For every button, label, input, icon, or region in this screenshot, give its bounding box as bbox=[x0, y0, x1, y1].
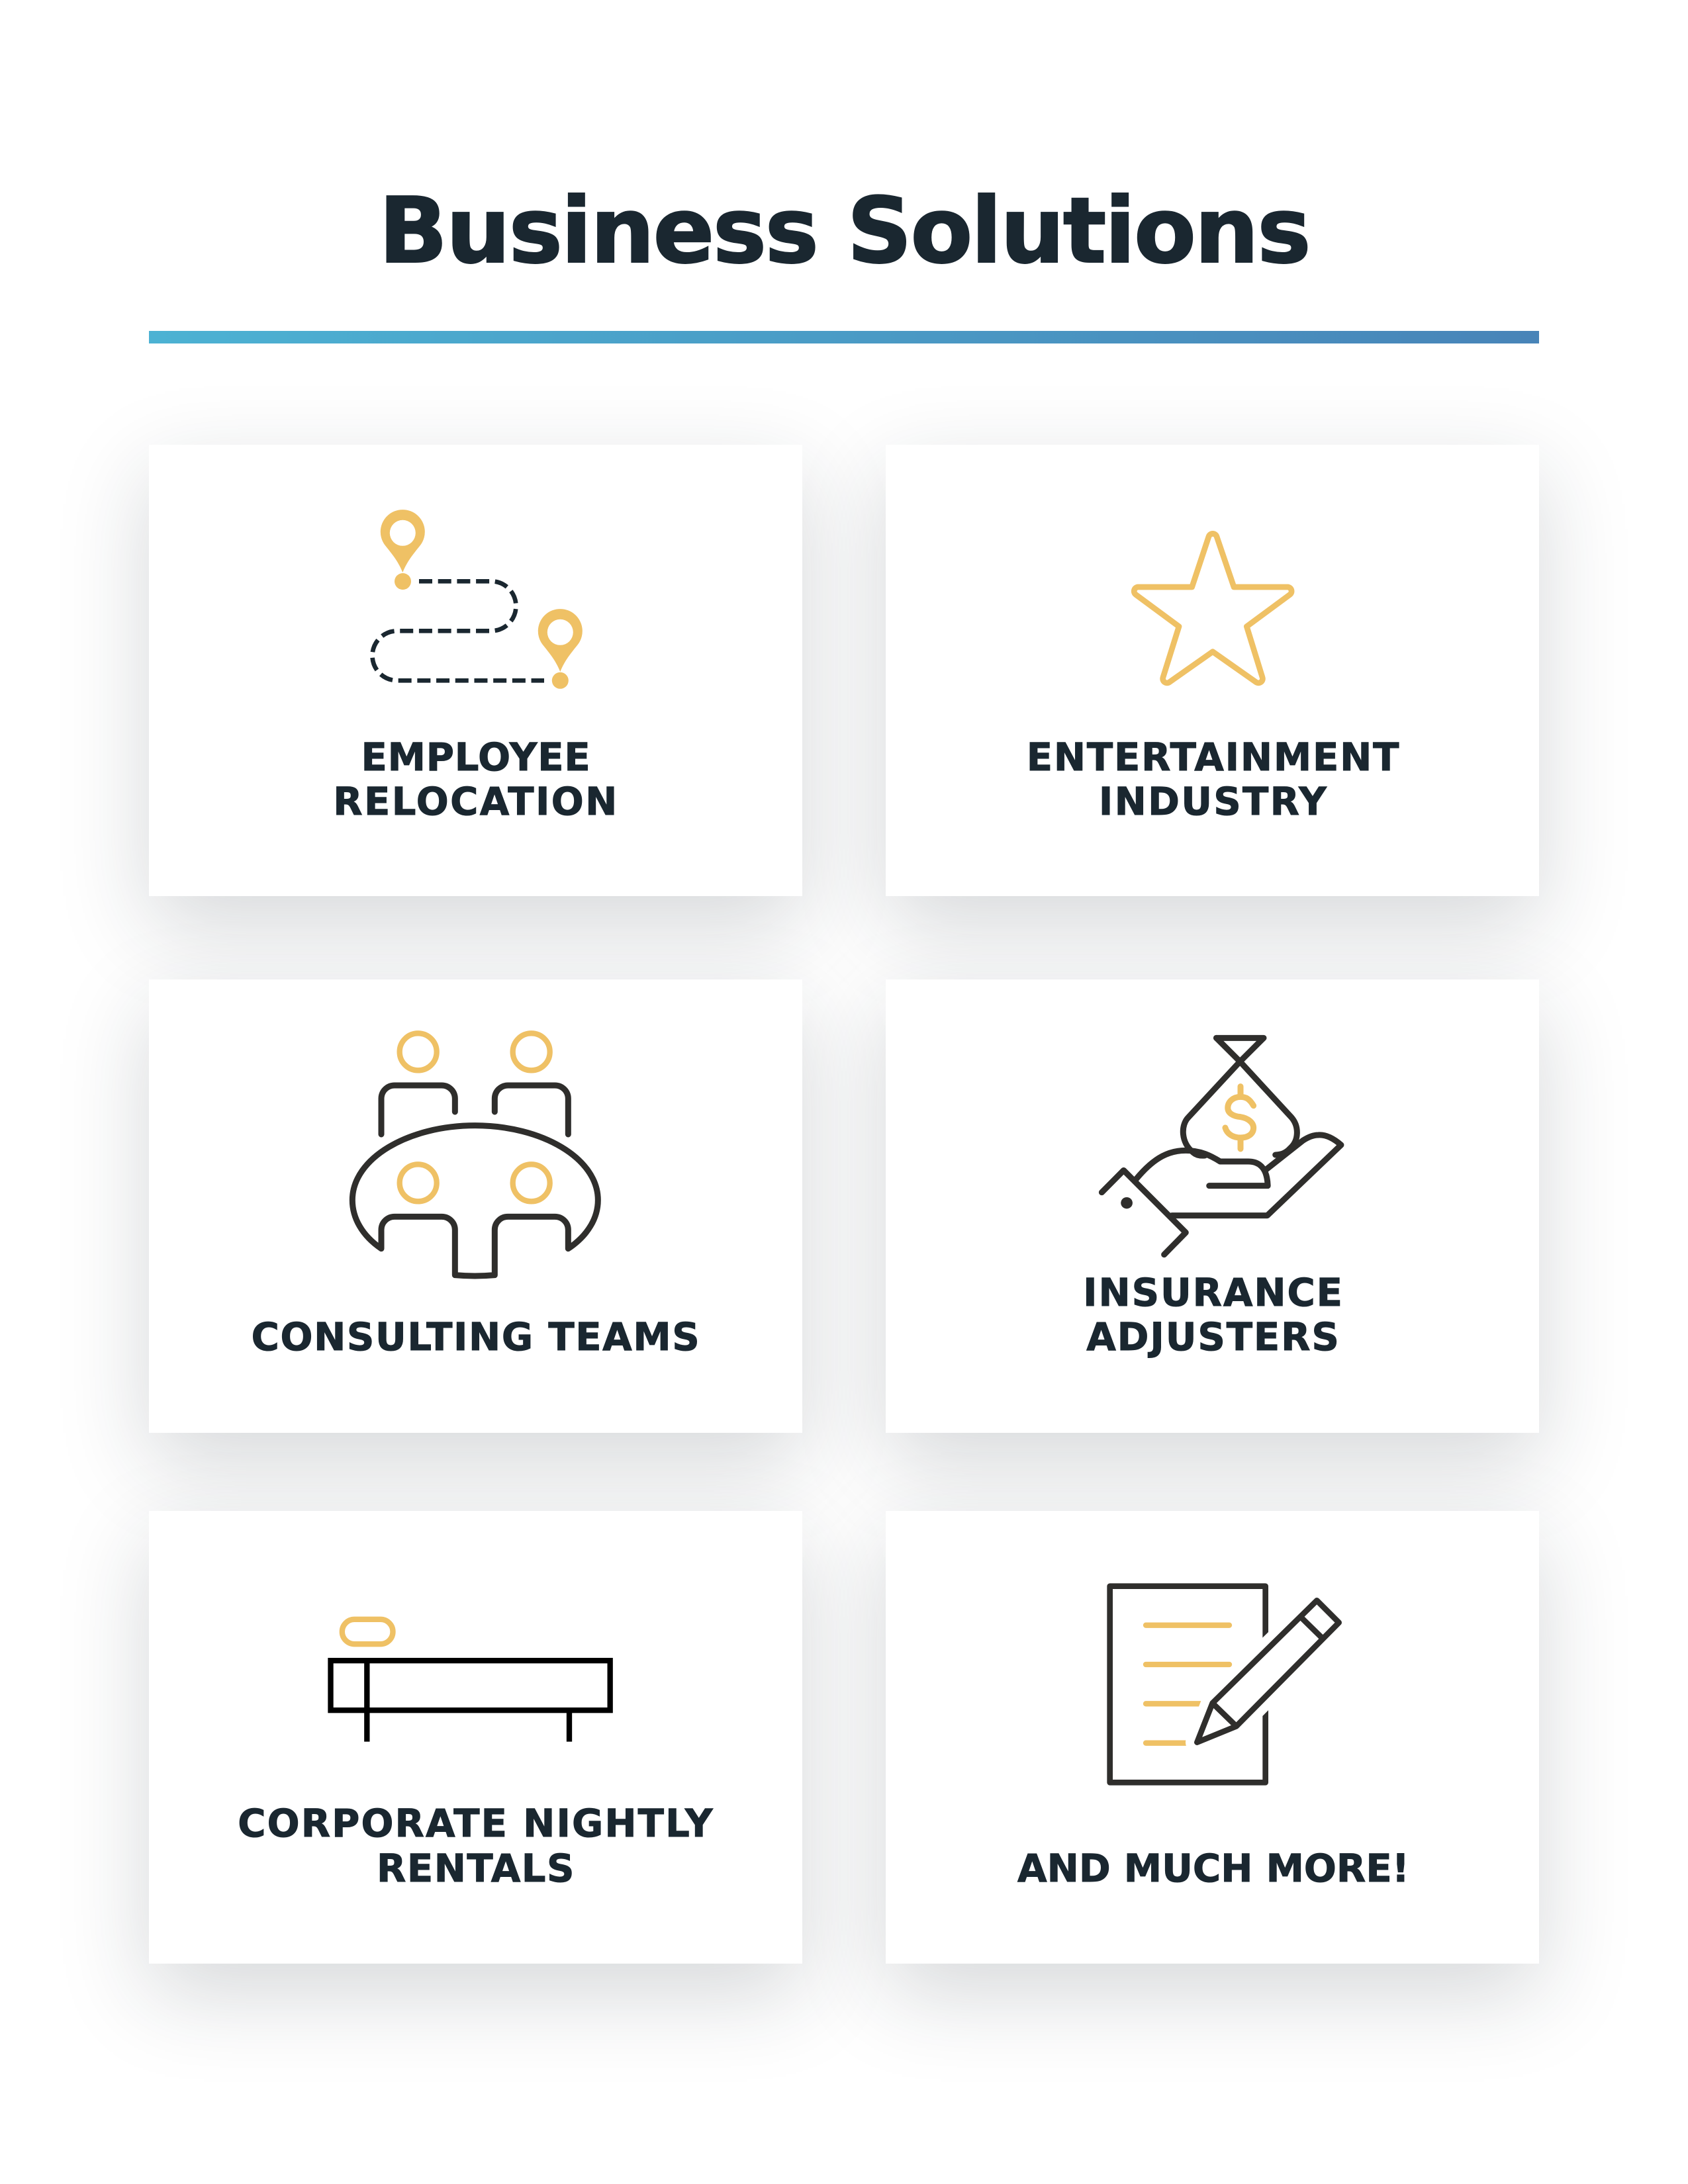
panel: consulting teams bbox=[149, 979, 802, 1433]
panel: employee relocation bbox=[149, 445, 802, 896]
label: employee relocation bbox=[333, 735, 619, 824]
icon: route with two pins bbox=[372, 510, 583, 689]
label: corporate nightly rentals bbox=[238, 1801, 714, 1891]
icon: star bbox=[1134, 533, 1291, 683]
label: employee relocation: RELOCATION bbox=[333, 780, 619, 824]
label: insurance adjusters bbox=[1083, 1271, 1344, 1359]
label: insurance adjusters: INSURANCE bbox=[1083, 1271, 1344, 1315]
panel: and much more bbox=[886, 1511, 1539, 1964]
title underline bbox=[149, 331, 1539, 343]
label: entertainment industry: ENTERTAINMENT bbox=[1027, 735, 1400, 780]
label: consulting teams: CONSULTING TEAMS bbox=[252, 1315, 700, 1359]
panel: entertainment industry bbox=[886, 445, 1539, 896]
label: insurance adjusters: ADJUSTERS bbox=[1086, 1315, 1340, 1359]
title: Business Solutions bbox=[379, 179, 1309, 284]
label: corporate nightly rentals: RENTALS bbox=[377, 1846, 575, 1891]
label: entertainment industry: INDUSTRY bbox=[1099, 780, 1328, 824]
label: employee relocation: EMPLOYEE bbox=[361, 735, 590, 780]
icon: hand holding money bag bbox=[1102, 1038, 1341, 1255]
icon: team around a table bbox=[352, 1033, 598, 1276]
panel: corporate nightly rentals bbox=[149, 1511, 802, 1964]
label: entertainment industry bbox=[1027, 735, 1400, 824]
label: corporate nightly rentals: CORPORATE NIGHTLY bbox=[238, 1801, 714, 1846]
icon: document and pencil bbox=[1110, 1586, 1339, 1782]
label: and much more: AND MUCH MORE! bbox=[1017, 1846, 1409, 1891]
panel: insurance adjusters bbox=[886, 979, 1539, 1433]
icon: bed bbox=[330, 1619, 610, 1742]
